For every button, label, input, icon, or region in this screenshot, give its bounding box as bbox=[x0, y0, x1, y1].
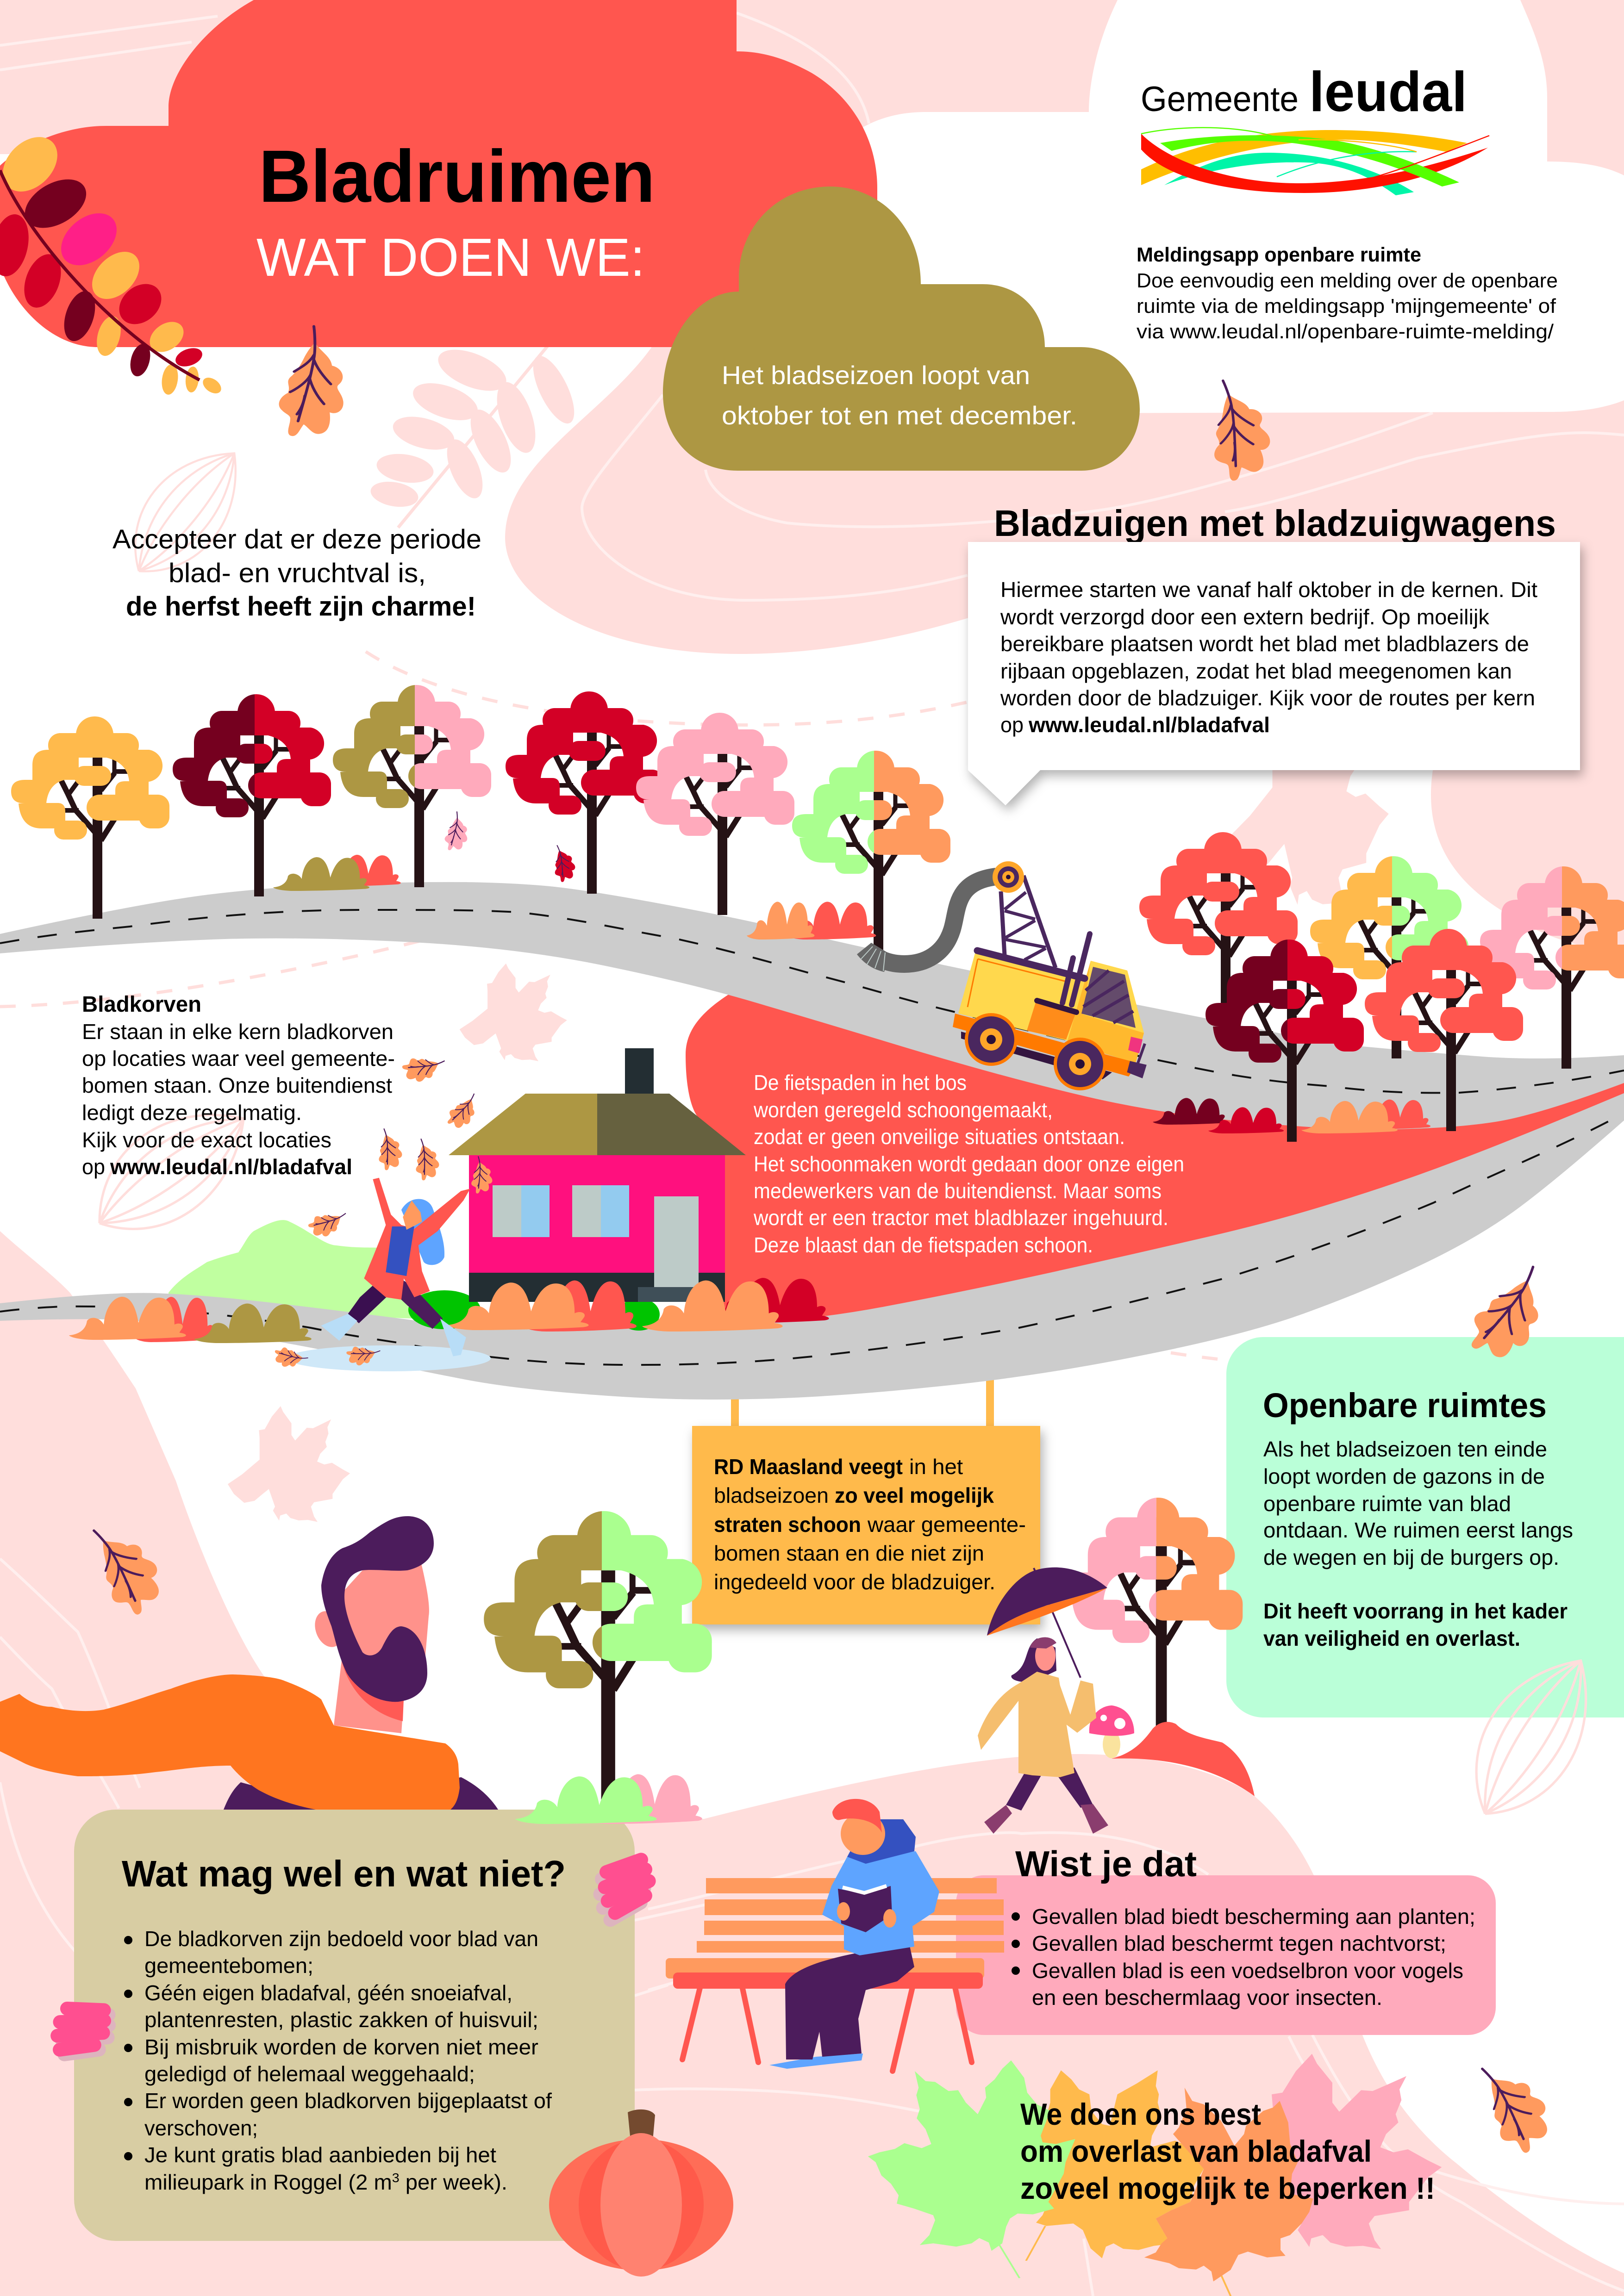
tree: green and orange bbox=[792, 751, 950, 953]
reader on bench bbox=[769, 1799, 939, 2069]
lower road bbox=[0, 1093, 1624, 1400]
RD Maasland text: bomen staan en die niet zijn bbox=[714, 1541, 984, 1565]
upper road bbox=[0, 882, 1624, 1129]
bladzuigen body text: worden door de bladzuiger. Kijk voor de routes per kern bbox=[1000, 686, 1535, 710]
fietspaden text: worden geregeld schoongemaakt, bbox=[753, 1098, 1053, 1122]
wat mag wel text: 3 bbox=[392, 2171, 400, 2185]
wist je dat list: Gevallen blad is een voedselbron voor vogels bbox=[1032, 1959, 1463, 1983]
fietspaden text: medewerkers van de buitendienst. Maar soms bbox=[754, 1179, 1162, 1203]
wat mag wel text: plantenresten, plastic zakken of huisvuil; bbox=[144, 2008, 538, 2032]
light green hill bbox=[169, 1220, 414, 1319]
tree: coral bbox=[1139, 832, 1298, 1034]
wat mag wel text: verschoven; bbox=[144, 2116, 258, 2140]
mushroom bbox=[1089, 1705, 1134, 1758]
fietspaden text: wordt er een tractor met bladblazer ingehuurd. bbox=[753, 1206, 1168, 1230]
running girl bbox=[321, 1178, 470, 1356]
bladzuigen body text: www.leudal.nl/bladafval bbox=[1028, 713, 1270, 737]
bladkorven text: ledigt deze regelmatig. bbox=[82, 1101, 302, 1125]
maple leaves bottom right bbox=[868, 2054, 1442, 2296]
fietspaden text bbox=[753, 1070, 1184, 1257]
bladzuigen body text: op bbox=[1000, 713, 1024, 737]
tree row: yellow bbox=[11, 716, 169, 919]
bladkorven text bbox=[82, 992, 395, 1179]
bench bbox=[666, 1878, 1004, 2071]
panel: openbare ruimtes: Dit heeft voorrang in het kader bbox=[1263, 1599, 1568, 1623]
oak leaf above openbare ruimtes bbox=[1463, 1253, 1557, 1368]
panel: wist je dat bbox=[956, 1875, 1496, 2035]
panel: openbare ruimtes bbox=[1226, 1337, 1624, 1837]
leaves around girl bbox=[275, 1048, 494, 1368]
falling leaf pink bbox=[445, 812, 467, 850]
accept autumn text: blad- en vruchtval is, bbox=[169, 558, 426, 588]
puddle bbox=[287, 1345, 491, 1371]
bladzuigen body text: rijbaan opgeblazen, zodat het blad meegenomen kan bbox=[1000, 659, 1512, 683]
heading bladzuigen: Bladzuigen met bladzuigwagens bbox=[994, 503, 1556, 544]
bladzuigen body text: bereikbare plaatsen wordt het blad met bladblazers de bbox=[1000, 632, 1529, 656]
house bbox=[449, 1048, 746, 1302]
tree: olive and pink bbox=[333, 685, 491, 887]
RD Maasland text: RD Maasland veegt bbox=[714, 1455, 903, 1479]
RD Maasland text: waar gemeente- bbox=[867, 1512, 1026, 1537]
pinnate pale leaf bbox=[369, 341, 582, 528]
pale maple leaf lower left bbox=[228, 1406, 350, 1522]
RD Maasland text: bladseizoen bbox=[714, 1483, 829, 1507]
wat mag wel text: Wat mag wel en wat niet? bbox=[122, 1853, 566, 1894]
heading wist je dat: Wist je dat bbox=[1015, 1843, 1197, 1884]
falling leaf crimson bbox=[546, 842, 579, 884]
wist je dat list bbox=[1012, 1904, 1475, 2010]
bladkorven text: bomen staan. Onze buitendienst bbox=[82, 1073, 392, 1097]
wat mag wel text: per week). bbox=[400, 2170, 507, 2194]
logo bbox=[1141, 60, 1489, 195]
fietspaden text: Deze blaast dan de fietspaden schoon. bbox=[754, 1233, 1093, 1257]
background: pink top blob bbox=[0, 0, 1624, 954]
bladzuigen body text bbox=[1000, 578, 1537, 737]
season text bbox=[722, 361, 1077, 430]
closing statement bbox=[1020, 2097, 1435, 2205]
meldingsapp text: ruimte via de meldingsapp 'mijngemeente' of bbox=[1137, 295, 1556, 317]
accept autumn text bbox=[112, 524, 481, 622]
meldingsapp text: via www.leudal.nl/openbare-ruimte-melding/ bbox=[1137, 320, 1554, 343]
tree: maroon and crimson bbox=[173, 694, 331, 896]
pale maple leaf behind trucks bbox=[1231, 685, 1389, 907]
closing statement: We doen ons best bbox=[1020, 2097, 1261, 2131]
tree: coral front bbox=[1365, 929, 1523, 1131]
title bbox=[256, 135, 655, 287]
fietspaden text: Het schoonmaken wordt gedaan door onze eigen bbox=[754, 1152, 1184, 1176]
woman with umbrella bbox=[978, 1568, 1108, 1834]
bladkorven text: www.leudal.nl/bladafval bbox=[110, 1155, 352, 1179]
meldingsapp text: Doe eenvoudig een melding over de openbare bbox=[1137, 269, 1558, 292]
wist je dat list: Gevallen blad biedt bescherming aan planten; bbox=[1032, 1904, 1475, 1929]
pale maple leaf by bladkorven bbox=[460, 964, 567, 1061]
bladzuigen body text: Hiermee starten we vanaf half oktober in de kernen. Dit bbox=[1000, 578, 1537, 602]
logo: Gemeente bbox=[1141, 80, 1299, 119]
wat mag wel text: geledigd of helemaal weggehaald; bbox=[144, 2062, 475, 2086]
leaf vacuum truck bbox=[857, 861, 1145, 1090]
panel: openbare ruimtes: de wegen en bij de burgers op. bbox=[1263, 1545, 1559, 1569]
bladkorven text: Kijk voor de exact locaties bbox=[82, 1128, 331, 1152]
RD Maasland text: zo veel mogelijk bbox=[835, 1483, 994, 1507]
meldingsapp text bbox=[1137, 243, 1558, 343]
panel: bladzuigen speech box bbox=[968, 542, 1580, 805]
oak leaf under title bbox=[279, 326, 344, 436]
panel: RD Maasland sign bbox=[692, 1426, 1040, 1624]
bladkorven text: op bbox=[82, 1155, 105, 1179]
accept autumn text: Accepteer dat er deze periode bbox=[112, 524, 481, 554]
RD Maasland text: in het bbox=[909, 1455, 963, 1479]
fietspaden text: De fietspaden in het bos bbox=[754, 1070, 967, 1095]
wat mag wel text: milieupark in Roggel (2 m bbox=[144, 2170, 386, 2194]
wat mag wel text: Er worden geen bladkorven bijgeplaatst of bbox=[144, 2089, 552, 2113]
tree: light pink bbox=[636, 713, 794, 915]
coral cycle path area bbox=[686, 994, 1624, 1333]
tree: maroon and crimson front bbox=[1206, 940, 1364, 1142]
panel: openbare ruimtes: ontdaan. We ruimen eerst langs bbox=[1263, 1518, 1573, 1542]
outline leaf top-left bbox=[109, 429, 263, 595]
bushes at house bbox=[69, 1278, 829, 1343]
RD Maasland text: ingedeeld voor de bladzuiger. bbox=[714, 1570, 995, 1594]
tree: pink and orange by green panel bbox=[1064, 1498, 1243, 1736]
panel: openbare ruimtes: Als het bladseizoen ten einde bbox=[1263, 1437, 1547, 1461]
pink glove left bbox=[53, 2001, 113, 2064]
dashed trail lines bbox=[0, 652, 1624, 1368]
wat mag wel text: De bladkorven zijn bedoeld voor blad van bbox=[144, 1927, 538, 1951]
oak leaf bottom right bbox=[1459, 2053, 1561, 2159]
pumpkin bbox=[549, 2109, 733, 2277]
background: pink lower hill bbox=[0, 1231, 1624, 2296]
bearded man with scarf bbox=[0, 1516, 498, 1810]
wat mag wel text: Je kunt gratis blad aanbieden bij het bbox=[144, 2143, 496, 2167]
red title cloud bbox=[0, 0, 877, 347]
panel: wat mag wel en wat niet bbox=[74, 1810, 635, 2241]
wist je dat list: en een beschermlaag voor insecten. bbox=[1032, 1985, 1382, 2010]
tree: olive and green large bbox=[484, 1511, 712, 1802]
tree: yellow and green bbox=[1310, 856, 1468, 1058]
accept autumn text: de herfst heeft zijn charme! bbox=[126, 591, 476, 622]
wat mag wel text: Géén eigen bladafval, géén snoeiafval, bbox=[144, 1981, 512, 2005]
fietspaden text: zodat er geen onveilige situaties ontstaan. bbox=[754, 1125, 1125, 1149]
panel: openbare ruimtes: loopt worden de gazons in de bbox=[1263, 1464, 1545, 1488]
leafy branch top-left bbox=[0, 126, 224, 397]
season text: Het bladseizoen loopt van bbox=[722, 361, 1030, 390]
title: WAT DOEN WE: bbox=[256, 227, 645, 287]
tree: crimson bbox=[506, 691, 664, 894]
wat mag wel text: gemeentebomen; bbox=[144, 1954, 313, 1978]
bladkorven text: Er staan in elke kern bladkorven bbox=[82, 1020, 394, 1044]
bladkorven text: op locaties waar veel gemeente- bbox=[82, 1046, 395, 1070]
logo: leudal bbox=[1309, 60, 1467, 123]
RD Maasland text: straten schoon bbox=[714, 1512, 861, 1537]
bushes on upper road bbox=[273, 855, 1430, 1133]
bladzuigen body text: wordt verzorgd door een extern bedrijf. Op moeilijk bbox=[1000, 605, 1490, 629]
wat mag wel text: Bij misbruik worden de korven niet meer bbox=[144, 2035, 538, 2059]
panel: openbare ruimtes: openbare ruimte van blad bbox=[1263, 1492, 1511, 1516]
coral bush on hill bbox=[1112, 1722, 1255, 1796]
bushes by panel bbox=[515, 1774, 702, 1824]
olive season cloud bbox=[663, 187, 1140, 471]
closing statement: om overlast van bladafval bbox=[1020, 2134, 1372, 2168]
wat mag wel text bbox=[122, 1853, 566, 2194]
closing statement: zoveel mogelijk te beperken !! bbox=[1020, 2171, 1435, 2205]
light green hill bush dots bbox=[408, 1290, 660, 1331]
title: Bladruimen bbox=[259, 135, 655, 218]
pink glove right bbox=[597, 1859, 653, 1921]
panel: openbare ruimtes: Openbare ruimtes bbox=[1263, 1386, 1547, 1425]
posts of RD Maasland sign bbox=[731, 1365, 994, 1430]
season text: oktober tot en met december. bbox=[722, 401, 1077, 430]
tree: pink and orange bbox=[1480, 866, 1624, 1069]
RD Maasland text bbox=[714, 1455, 1026, 1594]
outline leaf by Bladkorven bbox=[73, 1082, 269, 1258]
panel: openbare ruimtes: van veiligheid en overlast. bbox=[1263, 1626, 1520, 1650]
wist je dat list: Gevallen blad beschermt tegen nachtvorst; bbox=[1032, 1931, 1446, 1955]
oak leaf by logo cloud bbox=[1193, 373, 1279, 484]
bladkorven text: Bladkorven bbox=[82, 992, 201, 1017]
white logo cloud bbox=[852, 0, 1624, 414]
oak leaf lower left bbox=[71, 1514, 173, 1621]
meldingsapp text: Meldingsapp openbare ruimte bbox=[1137, 243, 1421, 266]
